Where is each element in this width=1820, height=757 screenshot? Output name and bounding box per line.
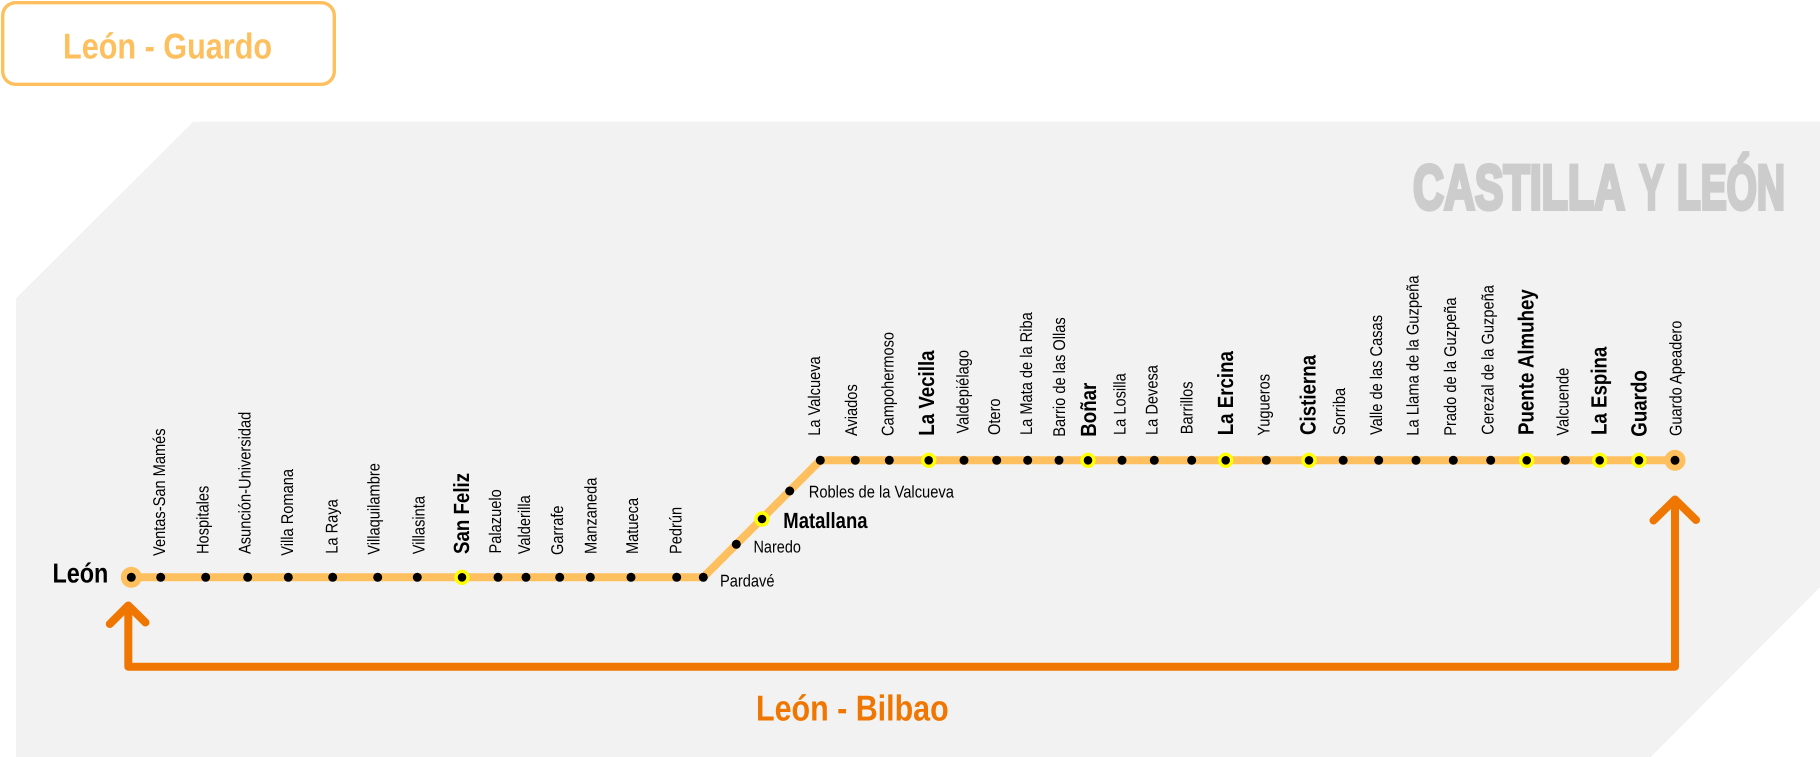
- station: La Devesa: La Devesa: [1143, 365, 1162, 435]
- station: La Raya: La Raya: [322, 499, 342, 554]
- station: Manzaneda: Manzaneda: [582, 477, 601, 554]
- arrow: León - Bilbao return connection: [110, 500, 1696, 667]
- station: Naredo: [732, 538, 801, 557]
- station: Robles de la Valcueva: Robles de la Valcueva: [809, 482, 954, 501]
- station: Pedrún: [666, 507, 686, 582]
- station: Garrafe: Garrafe: [548, 505, 567, 555]
- major station: Guardo: [1627, 370, 1652, 466]
- station: Villaquilambre: Villaquilambre: [364, 463, 384, 555]
- station: Valle de las Casas: Valle de las Casas: [1367, 315, 1386, 435]
- station: Ventas-San Mamés: Ventas-San Mamés: [150, 428, 169, 556]
- station: Otero: [985, 398, 1004, 465]
- major station: La Espina: La Espina: [1587, 346, 1612, 435]
- station: Pardavé: Pardavé: [720, 572, 774, 590]
- station: Villasinta: Villasinta: [409, 496, 428, 554]
- station: Cerezal de la Guzpeña: Cerezal de la Guzpeña: [1478, 285, 1497, 435]
- major station: Puente Almuhey: Puente Almuhey: [1514, 289, 1539, 435]
- title box: León - Guardo: León - Guardo: [63, 26, 272, 67]
- station: Asunción-Universidad: Asunción-Universidad: [236, 412, 254, 554]
- station: Barrillos: [1178, 381, 1197, 465]
- station: Palazuelo: Palazuelo: [486, 489, 505, 554]
- station: Hospitales: Hospitales: [193, 486, 212, 554]
- terminal: Guardo Apeadero: Guardo Apeadero: [1666, 321, 1686, 436]
- region heading: Castilla y León: CASTILLA: [1413, 153, 1625, 223]
- station: Matueca: [623, 497, 642, 582]
- station: Aviados: [842, 384, 861, 465]
- station: La Llama de la Guzpeña: La Llama de la Guzpeña: [1404, 275, 1423, 436]
- station: Villa Romana: Villa Romana: [278, 469, 297, 556]
- major station: La Ercina: La Ercina: [1213, 350, 1238, 435]
- terminal: León: León: [52, 558, 108, 589]
- station: La Losilla: La Losilla: [1110, 373, 1129, 435]
- station: Valcuende: Valcuende: [1554, 368, 1573, 436]
- major station: Boñar: [1076, 382, 1101, 466]
- station: La Valcueva: La Valcueva: [805, 356, 824, 436]
- station: La Raya: [322, 499, 342, 582]
- station: Barrio de las Ollas: Barrio de las Ollas: [1050, 317, 1069, 437]
- major station: Matallana: Matallana: [783, 508, 868, 533]
- station: Sorriba: [1330, 387, 1349, 465]
- terminal: León: [52, 558, 142, 589]
- major station: La Vecilla: La Vecilla: [914, 350, 939, 436]
- route label: León - Bilbao: León - Bilbao: [756, 688, 949, 729]
- station: Barrillos: Barrillos: [1178, 381, 1197, 434]
- station: Matueca: Matueca: [623, 497, 642, 554]
- route line: León to Guardo: [131, 460, 1675, 577]
- station: La Losilla: [1110, 373, 1129, 465]
- terminal: Guardo Apeadero: [1664, 321, 1686, 471]
- station: Sorriba: Sorriba: [1330, 387, 1349, 435]
- station: Valderilla: Valderilla: [515, 495, 534, 554]
- station: Campohermoso: Campohermoso: [878, 332, 897, 436]
- station: Garrafe: [548, 505, 567, 582]
- major station: Guardo: Guardo: [1627, 370, 1652, 437]
- station: Otero: Otero: [985, 398, 1004, 435]
- station: Valdepiélago: Valdepiélago: [953, 350, 972, 434]
- major station: Boñar: Boñar: [1076, 382, 1101, 437]
- region heading: Castilla y León: Y: [1640, 153, 1664, 223]
- major station: Cistierna: Cistierna: [1296, 354, 1321, 435]
- title box: León - Guardo: [3, 3, 334, 84]
- station: Villasinta: [409, 496, 428, 582]
- station: Palazuelo: [486, 489, 505, 582]
- station: Aviados: Aviados: [842, 384, 861, 436]
- station: Yugueros: [1254, 374, 1273, 465]
- station: La Mata de la Riba: La Mata de la Riba: [1017, 312, 1036, 435]
- major station: San Feliz: San Feliz: [449, 473, 474, 554]
- station: Pedrún: Pedrún: [666, 507, 686, 554]
- station: Yugueros: Yugueros: [1254, 374, 1273, 436]
- station: Valderilla: [515, 495, 534, 582]
- station: Prado de la Guzpeña: Prado de la Guzpeña: [1441, 297, 1460, 436]
- station: La Devesa: [1143, 365, 1162, 465]
- station: Naredo: Naredo: [754, 538, 801, 557]
